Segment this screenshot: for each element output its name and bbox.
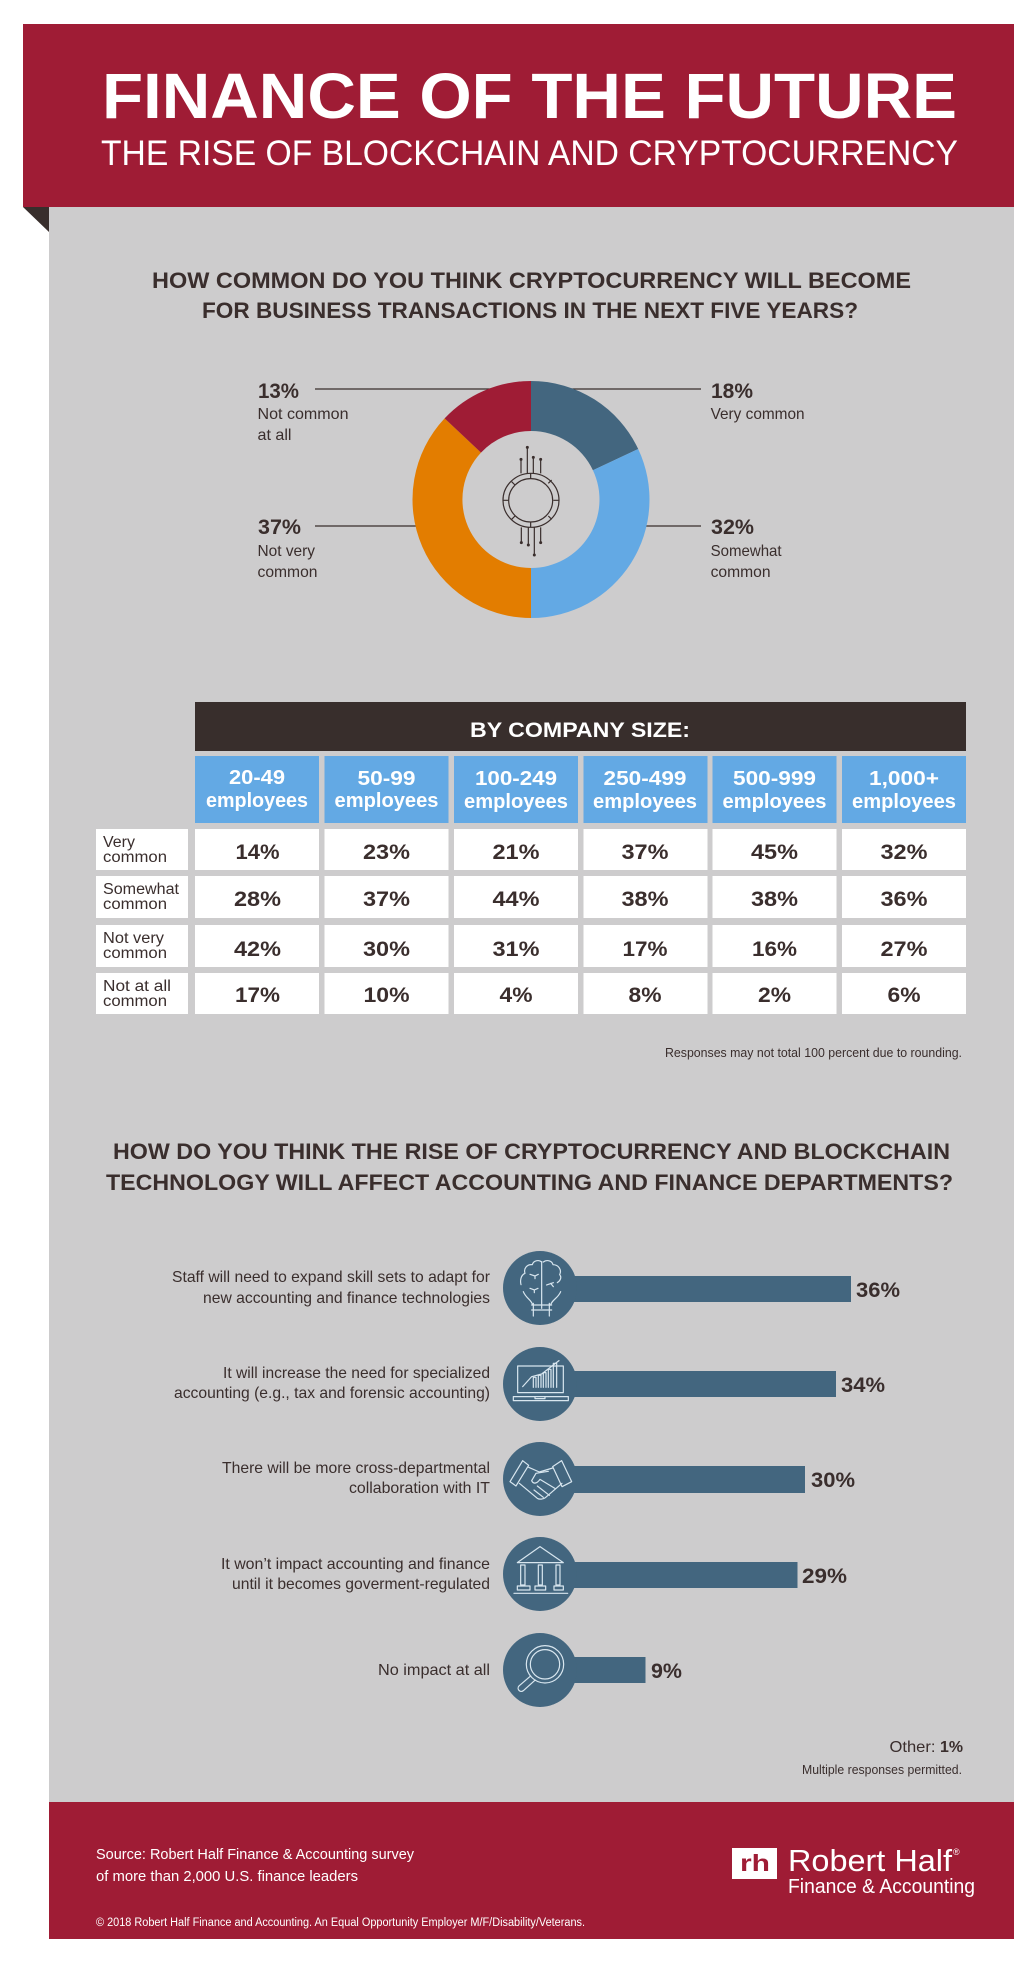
bar row: collaboration 30%: There will be more cross-departmental	[222, 1460, 490, 1477]
label: 32% somewhat common	[711, 516, 782, 581]
row: somewhat common: Somewhat	[103, 881, 180, 898]
heading: question one: HOW COMMON DO YOU THINK CRYPTOCURRENCY WILL BECOME	[152, 268, 911, 293]
bar row: specialized accounting 34%: It will increase the need for specialized	[223, 1365, 490, 1382]
heading: question two: TECHNOLOGY WILL AFFECT ACCOUNTING AND FINANCE DEPARTMENTS?	[106, 1170, 953, 1195]
column headers: employees	[206, 790, 308, 812]
heading: question two	[106, 1139, 953, 1195]
column headers: 250-499	[604, 768, 686, 790]
label: 13% not common at all: at all	[258, 427, 292, 444]
bar row: collaboration 30%: collaboration with IT	[349, 1480, 490, 1497]
bar row: skill sets 36%: new accounting and finance technologies	[203, 1290, 490, 1307]
row: not very common: Not very	[103, 930, 164, 947]
bar row: skill sets 36%: Staff will need to expand skill sets to adapt for	[172, 1269, 491, 1286]
column headers	[195, 756, 966, 823]
row: very common: 32%	[880, 841, 928, 864]
label: 37% not very common: common	[258, 564, 318, 581]
row: very common: 14%	[236, 841, 280, 864]
bar row: collaboration 30%: 30%	[811, 1469, 855, 1492]
other note: Other:	[890, 1739, 936, 1756]
row: somewhat common: 28%	[234, 888, 281, 911]
row: very common: Very	[103, 834, 135, 851]
row: very common	[96, 829, 966, 870]
row: not at all common: common	[103, 993, 167, 1010]
label: 32% somewhat common: common	[711, 564, 771, 581]
icon: brain light bulb	[521, 1261, 561, 1316]
heading: question two: HOW DO YOU THINK THE RISE OF CRYPTOCURRENCY AND BLOCKCHAIN	[113, 1139, 950, 1164]
row: not at all common: 10%	[364, 984, 410, 1007]
icon: magnifying glass	[518, 1646, 564, 1691]
bar row: no impact 9%	[378, 1633, 682, 1707]
label: 13% not common at all: Not common	[258, 406, 348, 423]
bar row: specialized accounting 34%: 34%	[841, 1374, 885, 1397]
row: somewhat common: 38%	[751, 888, 798, 911]
icon: laptop with growth chart	[513, 1361, 568, 1401]
row: very common: 37%	[622, 841, 669, 864]
label: 32% somewhat common: 32%	[711, 516, 754, 539]
column headers: employees	[852, 791, 956, 813]
bar row: government regulated 29%: It won’t impact accounting and finance	[221, 1556, 490, 1573]
icon: classical bank building	[514, 1547, 568, 1593]
footer: of more than 2,000 U.S. finance leaders	[96, 1868, 358, 1885]
row: somewhat common: 37%	[363, 888, 410, 911]
column headers: employees	[334, 790, 438, 812]
donut chart	[258, 380, 805, 618]
header banner	[23, 24, 1014, 232]
logo: Robert Half: rh	[740, 1850, 770, 1876]
label: 18% very common: 18%	[711, 380, 753, 403]
title: FINANCE OF THE FUTURE	[102, 60, 957, 132]
logo: Robert Half: ®	[953, 1847, 960, 1857]
other note: 1%	[940, 1739, 963, 1756]
row: not at all common: 6%	[888, 984, 921, 1007]
row: not at all common: 8%	[628, 984, 662, 1007]
row: not at all common: 17%	[235, 984, 280, 1007]
other note	[802, 1739, 963, 1777]
table heading	[195, 702, 966, 751]
copyright: © 2018 Robert Half Finance and Accounting. An Equal Opportunity Employer M/F/Disability/Veterans.	[96, 1917, 585, 1929]
column headers: employees	[593, 791, 697, 813]
bar row: government regulated 29%	[221, 1537, 847, 1611]
column headers: 100-249	[475, 768, 557, 790]
column headers: employees	[464, 791, 568, 813]
row: not very common	[96, 925, 966, 967]
icon: blockchain circuit coin	[503, 446, 559, 556]
row: not very common: 17%	[622, 938, 668, 961]
row: very common: 45%	[751, 841, 798, 864]
row: very common: common	[103, 849, 167, 866]
bar row: specialized accounting 34%: accounting (e.g., tax and forensic accounting)	[174, 1385, 490, 1402]
bar row: specialized accounting 34%	[174, 1347, 885, 1421]
row: not very common: 30%	[363, 938, 410, 961]
table heading: BY COMPANY SIZE:	[470, 719, 690, 742]
column headers: employees	[722, 791, 826, 813]
other note: Multiple responses permitted.	[802, 1762, 962, 1777]
row: not very common: 42%	[234, 938, 281, 961]
row: not very common: common	[103, 945, 167, 962]
heading: question one: FOR BUSINESS TRANSACTIONS IN THE NEXT FIVE YEARS?	[202, 298, 858, 323]
row: not at all common	[96, 973, 966, 1014]
heading: question one	[152, 268, 911, 323]
row: not at all common: Not at all	[103, 978, 171, 995]
panel: grey background	[49, 207, 1014, 1803]
row: not at all common: 4%	[500, 984, 533, 1007]
column headers: 50-99	[358, 768, 416, 790]
bar row: collaboration 30%	[222, 1442, 855, 1516]
bar row: no impact 9%: 9%	[651, 1660, 682, 1683]
label: 37% not very common: Not very	[258, 543, 315, 560]
logo: Robert Half: Finance & Accounting	[788, 1876, 975, 1898]
row: very common: 21%	[492, 841, 540, 864]
logo: Robert Half	[732, 1843, 975, 1898]
label: 37% not very common: 37%	[258, 516, 301, 539]
column headers: 1,000+	[869, 768, 939, 790]
icon: handshake	[510, 1461, 572, 1499]
row: somewhat common: 38%	[622, 888, 669, 911]
source text: Source: Robert Half Finance & Accounting survey	[96, 1846, 414, 1863]
row: somewhat common	[96, 876, 966, 918]
row: very common: 23%	[363, 841, 410, 864]
row: somewhat common: common	[103, 896, 167, 913]
row: not very common: 27%	[880, 938, 928, 961]
subtitle: THE RISE OF BLOCKCHAIN AND CRYPTOCURRENCY	[101, 134, 958, 173]
column headers: 500-999	[733, 768, 816, 790]
table footnote: Responses may not total 100 percent due to rounding.	[665, 1045, 962, 1060]
bar row: skill sets 36%	[172, 1251, 900, 1325]
bar row: skill sets 36%: 36%	[856, 1279, 900, 1302]
header fold	[23, 207, 49, 232]
logo: Robert Half: Robert Half	[788, 1843, 952, 1878]
label: 18% very common	[711, 380, 805, 423]
column headers: 20-49	[229, 767, 285, 789]
row: somewhat common: 44%	[492, 888, 540, 911]
label: 13% not common at all	[258, 380, 348, 444]
bar row: no impact 9%: No impact at all	[378, 1662, 490, 1679]
bar row: government regulated 29%: until it becomes goverment-regulated	[232, 1576, 490, 1593]
label: 32% somewhat common: Somewhat	[711, 543, 782, 560]
label: 37% not very common	[258, 516, 318, 581]
row: not very common: 31%	[492, 938, 540, 961]
row: not at all common: 2%	[758, 984, 791, 1007]
table: by company size	[96, 702, 966, 1014]
label: 18% very common: Very common	[711, 406, 805, 423]
footer	[49, 1802, 1014, 1939]
bar row: government regulated 29%: 29%	[802, 1565, 847, 1588]
row: not very common: 16%	[752, 938, 797, 961]
row: somewhat common: 36%	[880, 888, 928, 911]
label: 13% not common at all: 13%	[258, 380, 299, 403]
